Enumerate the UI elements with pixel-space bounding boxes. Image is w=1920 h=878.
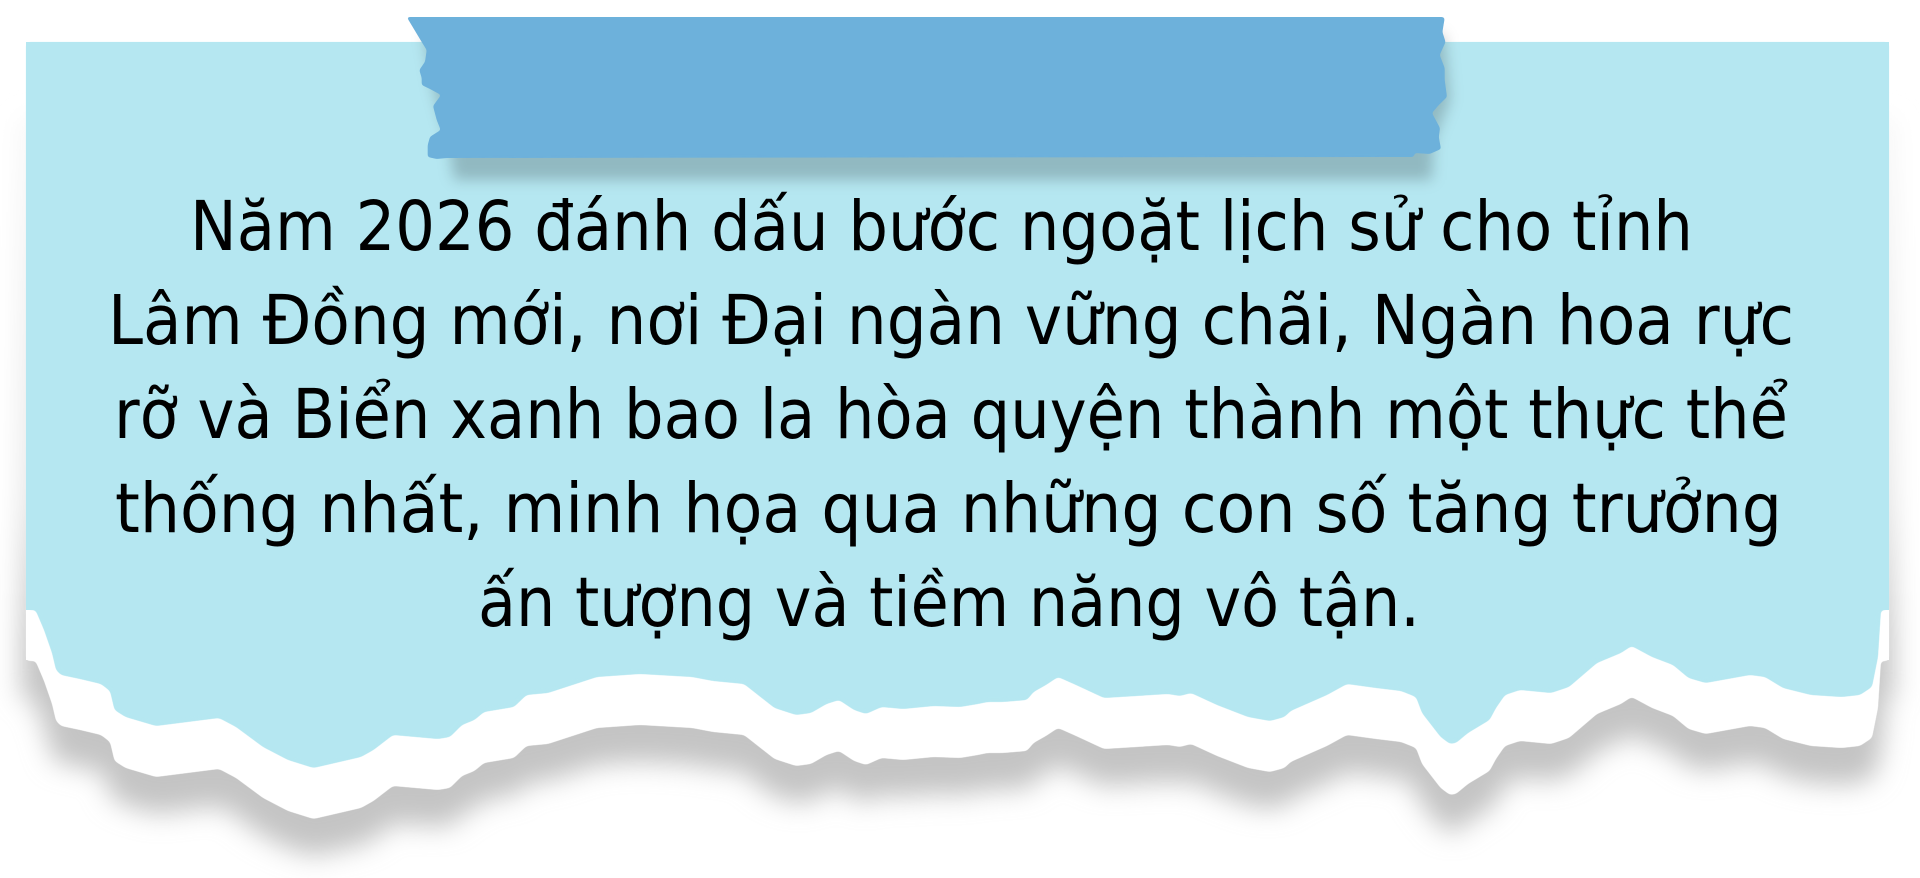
intro text block: ấn tượng và tiềm năng vô tận. [478,563,1420,643]
intro text block: Năm 2026 đánh dấu bước ngoặt lịch sử cho tỉnh [190,187,1693,267]
intro text block: thống nhất, minh họa qua những con số tăng trưởng [115,469,1782,549]
intro text block [108,187,1794,643]
blue tape banner [407,17,1447,159]
intro text block: Lâm Đồng mới, nơi Đại ngàn vững chãi, Ngàn hoa rực [108,281,1794,361]
intro text block: rỡ và Biển xanh bao la hòa quyện thành một thực thể [114,375,1788,455]
tape shadow [424,34,1450,180]
